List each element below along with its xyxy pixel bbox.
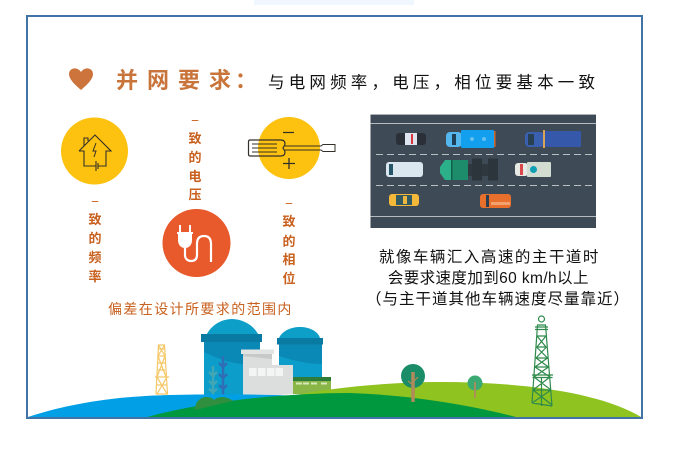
label: frequency: 频 — [88, 250, 102, 265]
icon: small tree — [468, 376, 482, 398]
caption: deviation: 偏差在设计所要求的范围内 — [108, 301, 293, 317]
building: gray plant — [241, 350, 293, 398]
text: highway analogy: 会要求速度加到60 km/h以上 — [388, 269, 589, 287]
icon: large tree — [401, 364, 425, 402]
label: voltage: 的 — [188, 150, 202, 165]
vehicle: dark blue truck — [525, 130, 581, 148]
text: highway analogy: （与主干道其他车辆速度尽量靠近） — [366, 290, 630, 308]
vehicle: white van — [386, 162, 423, 177]
label: frequency: 率 — [88, 269, 102, 284]
hill: dark green — [147, 393, 516, 417]
vehicle: orange car — [480, 194, 511, 208]
vehicle: blue truck — [446, 130, 496, 148]
label: phase: 位 — [282, 271, 296, 286]
reactor: large — [201, 319, 262, 402]
label: phase: 致 — [282, 214, 296, 229]
icon: house circle — [61, 118, 128, 184]
illustration: power plant landscape — [28, 316, 641, 417]
label: phase: 一 — [286, 201, 292, 208]
reactor: small — [277, 327, 323, 387]
title: ： — [235, 68, 266, 93]
chart: highway illustration — [370, 114, 596, 228]
icon: green tower — [532, 316, 553, 406]
vehicle: police car — [396, 133, 426, 145]
icon: plug circle — [162, 209, 230, 277]
panel: phase — [248, 117, 335, 286]
label: frequency: 的 — [88, 231, 102, 246]
hill: light green — [290, 382, 641, 417]
icon: yellow tower — [155, 345, 169, 394]
vehicle: green truck — [440, 158, 498, 180]
vehicle: ambulance — [515, 162, 551, 177]
hill: blue — [28, 394, 300, 417]
title: 并网要求 — [116, 68, 240, 93]
icon: plants — [209, 356, 227, 397]
icon: bushes — [195, 397, 233, 410]
label: voltage: 致 — [188, 131, 202, 146]
building: green annex — [293, 377, 331, 394]
label: voltage: 压 — [188, 187, 202, 202]
vehicle: taxi — [389, 194, 419, 206]
text: highway analogy: 就像车辆汇入高速的主干道时 — [379, 248, 600, 266]
label: phase: 的 — [282, 234, 296, 249]
label: frequency: 致 — [88, 212, 102, 227]
icon: screwdriver circle — [248, 117, 335, 179]
label: phase: 相 — [282, 252, 296, 267]
label: voltage: 一 — [192, 118, 198, 125]
label: frequency: 一 — [92, 199, 98, 206]
icon: heart — [69, 68, 93, 90]
panel: frequency — [61, 118, 128, 284]
label: voltage: 电 — [188, 169, 202, 184]
subtitle: 与电网频率，电压，相位要基本一致 — [268, 73, 599, 92]
